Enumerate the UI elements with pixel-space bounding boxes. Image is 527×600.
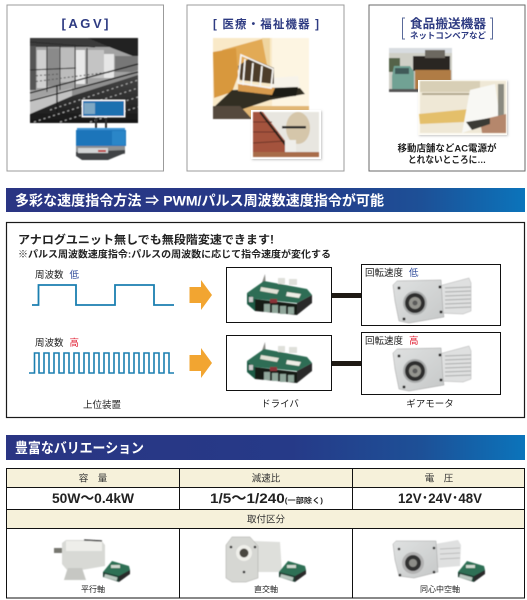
box: motor high speed: 回転速度 高	[365, 335, 419, 347]
value: capacity: 50W〜0.4kW	[52, 490, 135, 506]
header: mounting type: 取付区分	[247, 514, 285, 526]
banner: wide variations	[6, 435, 525, 460]
panel: medical and welfare equipment	[187, 5, 344, 171]
heading: stepless speed change: アナログユニット無しでも無段階変速できます!	[18, 232, 274, 246]
product: parallel shaft motor	[54, 540, 130, 594]
label: gear motor: ギアモータ	[406, 399, 454, 410]
photo: conveyor with food	[418, 80, 507, 135]
photo: stair lift	[251, 110, 321, 159]
photo: food truck	[389, 48, 452, 92]
value: reduction ratio: 1/5〜1/240 (一部除く)	[210, 490, 324, 506]
connector: driver to motor high	[332, 361, 361, 366]
caption: food truck note	[398, 142, 497, 166]
label: driver: ドライバ	[261, 399, 299, 410]
label: high frequency: 周波数 高	[35, 337, 79, 349]
panel: AGV	[7, 5, 164, 171]
connector: driver to motor low	[332, 293, 361, 298]
chart: high frequency pulse wave	[29, 353, 174, 373]
photo: factory conveyor	[30, 38, 138, 123]
product: right angle shaft motor: 直交軸	[254, 584, 278, 594]
heading: food transport equipment	[402, 16, 492, 40]
header: reduction ratio: 減速比	[252, 472, 281, 484]
product: concentric hollow shaft motor	[393, 540, 485, 594]
box: motor high speed	[362, 332, 500, 394]
box: motor low speed: 回転速度 低	[365, 267, 419, 279]
heading: food transport equipment: 食品搬送機器	[410, 16, 486, 31]
banner: speed command methods	[6, 188, 525, 212]
heading: food transport equipment: ネットコンベアなど	[410, 30, 486, 40]
box: motor low speed	[362, 264, 500, 326]
box: driver low	[226, 268, 332, 322]
product: concentric hollow shaft motor: 同心中空軸	[420, 584, 460, 594]
table: specifications	[6, 468, 525, 598]
arrow: high frequency to driver	[190, 348, 212, 378]
panel: food transport equipment	[369, 5, 525, 171]
product: right angle shaft motor	[226, 537, 306, 594]
subheading: pulse frequency note: ※パルス周波数速度指令:パルスの周波数に応じて指令速度が変化する	[18, 248, 331, 260]
label: host controller: 上位装置	[83, 399, 121, 411]
chart: low frequency pulse wave	[32, 285, 174, 305]
heading: medical and welfare: [ 医療・福祉機器 ]	[213, 17, 319, 31]
label: low frequency: 周波数 低	[35, 269, 80, 281]
arrow: low frequency to driver	[190, 280, 212, 310]
header: capacity: 容 量	[79, 472, 108, 484]
panel: pulse frequency speed command	[6, 222, 524, 418]
icon: AGV robot with blue bins	[76, 100, 126, 160]
value: voltage: 12V･24V･48V	[398, 490, 483, 506]
caption: food truck note: とれないところに…	[408, 155, 486, 166]
photo: care bed	[213, 38, 309, 119]
caption: food truck note: 移動店舗などAC電源が	[398, 142, 497, 154]
header: voltage: 電 圧	[425, 474, 454, 484]
banner: wide variations: 豊富なバリエーション	[15, 440, 144, 456]
heading: AGV: [AGV]	[62, 16, 108, 31]
product: parallel shaft motor: 平行軸	[81, 584, 105, 594]
box: driver high	[226, 336, 332, 390]
banner: speed command methods: 多彩な速度指令方法 ⇒ PWM/パルス周波数速度指令が可能	[15, 192, 384, 208]
